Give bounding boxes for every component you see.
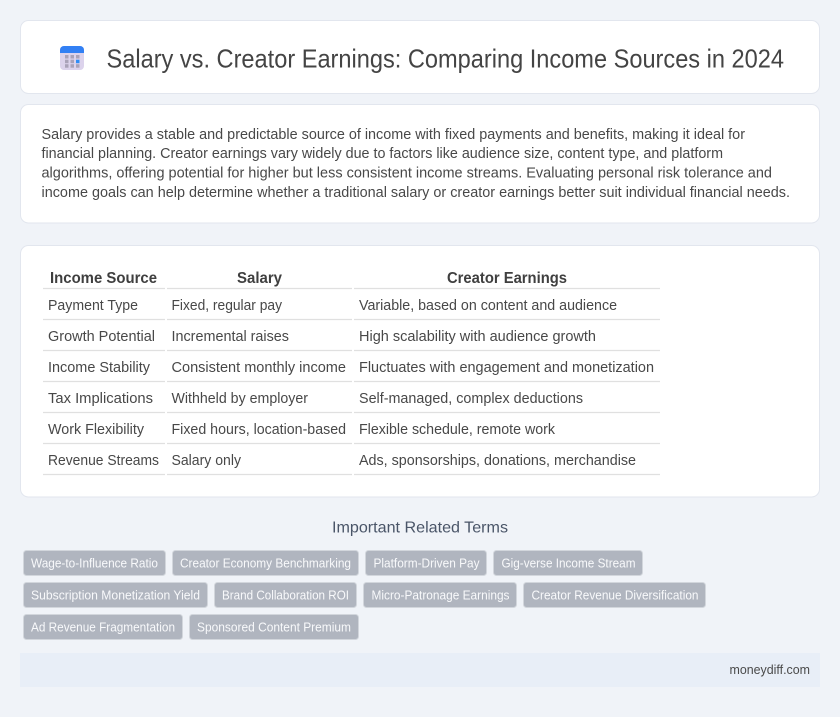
row: income stability: Fluctuates with engagement and monetization [359,360,654,376]
text block: summary [42,127,790,201]
table header row: Income Source [50,270,157,287]
table header row: Creator Earnings [447,270,567,287]
row: payment type: Variable, based on content and audience [359,298,617,314]
tag: subscription monetization yield [24,582,208,608]
tag: micro-patronage earnings [364,582,516,608]
row: payment type: Fixed, regular pay [172,298,283,314]
row: work flexibility [48,422,556,438]
row: revenue streams [48,453,636,469]
tag: creator revenue diversification [524,582,706,608]
row: revenue streams: Revenue Streams [48,453,159,469]
tag: micro-patronage earnings: Micro-Patronage Earnings [372,587,510,602]
text block: summary: algorithms, offering potential for higher but less consistent income streams. Evaluating personal risk tolerance and [42,166,772,182]
row: work flexibility: Fixed hours, location-based [172,422,346,438]
tag: creator revenue diversification: Creator Revenue Diversification [532,587,698,602]
row: payment type: Payment Type [48,298,138,314]
tag: platform-driven pay: Platform-Driven Pay [374,555,480,570]
tag: subscription monetization yield: Subscription Monetization Yield [31,587,200,602]
tag: gig-verse income stream: Gig-verse Income Stream [502,555,636,570]
tag: platform-driven pay [366,550,486,576]
row: work flexibility: Flexible schedule, remote work [359,422,556,438]
row: growth potential: Growth Potential [48,329,155,345]
text block: summary: income goals can help determine whether a traditional salary or creator earnings better suit individual financial needs. [42,185,790,201]
title: Salary vs. Creator Earnings: Comparing Income Sources in 2024 [106,46,784,74]
table header row: Salary [237,270,282,287]
table header row [50,270,567,287]
tag: wage-to-influence ratio [24,550,166,576]
panel: header [20,20,820,94]
text block: summary: Salary provides a stable and predictable source of income with fixed payments and benefits, making it ideal for [42,127,745,143]
row: tax implications: Withheld by employer [172,391,308,407]
row: income stability [48,360,654,376]
panel: comparison table [20,246,820,497]
tag: creator economy benchmarking [172,550,358,576]
row: payment type [48,298,617,314]
row: revenue streams: Salary only [172,453,242,469]
row: work flexibility: Work Flexibility [48,422,145,438]
tag: brand collaboration roi: Brand Collaboration ROI [222,587,349,602]
row: income stability: Income Stability [48,360,151,376]
row: growth potential: High scalability with audience growth [359,329,596,345]
tag: ad revenue fragmentation: Ad Revenue Fragmentation [31,619,175,634]
tag: wage-to-influence ratio: Wage-to-Influence Ratio [31,555,158,570]
tag: ad revenue fragmentation [24,614,182,640]
row: tax implications: Tax Implications [48,391,153,407]
text block: summary: financial planning. Creator earnings vary widely due to factors like audience size, content type, and platform [42,146,723,162]
footer [20,653,820,687]
panel: related term tags [24,550,706,640]
row: growth potential: Incremental raises [172,329,289,345]
tag: brand collaboration roi [214,582,356,608]
tag: sponsored content premium: Sponsored Content Premium [197,619,351,634]
row: tax implications: Self-managed, complex deductions [359,391,583,407]
row: growth potential [48,329,596,345]
row: tax implications [48,391,583,407]
tag: sponsored content premium [190,614,358,640]
tag: creator economy benchmarking: Creator Economy Benchmarking [180,555,351,570]
row: income stability: Consistent monthly income [172,360,346,376]
footer credit: moneydiff.com [730,662,810,677]
panel: intro text [20,104,820,223]
heading: related terms: Important Related Terms [332,520,508,536]
row: revenue streams: Ads, sponsorships, donations, merchandise [359,453,636,469]
icon: calendar [60,46,84,70]
tag: gig-verse income stream [494,550,642,576]
